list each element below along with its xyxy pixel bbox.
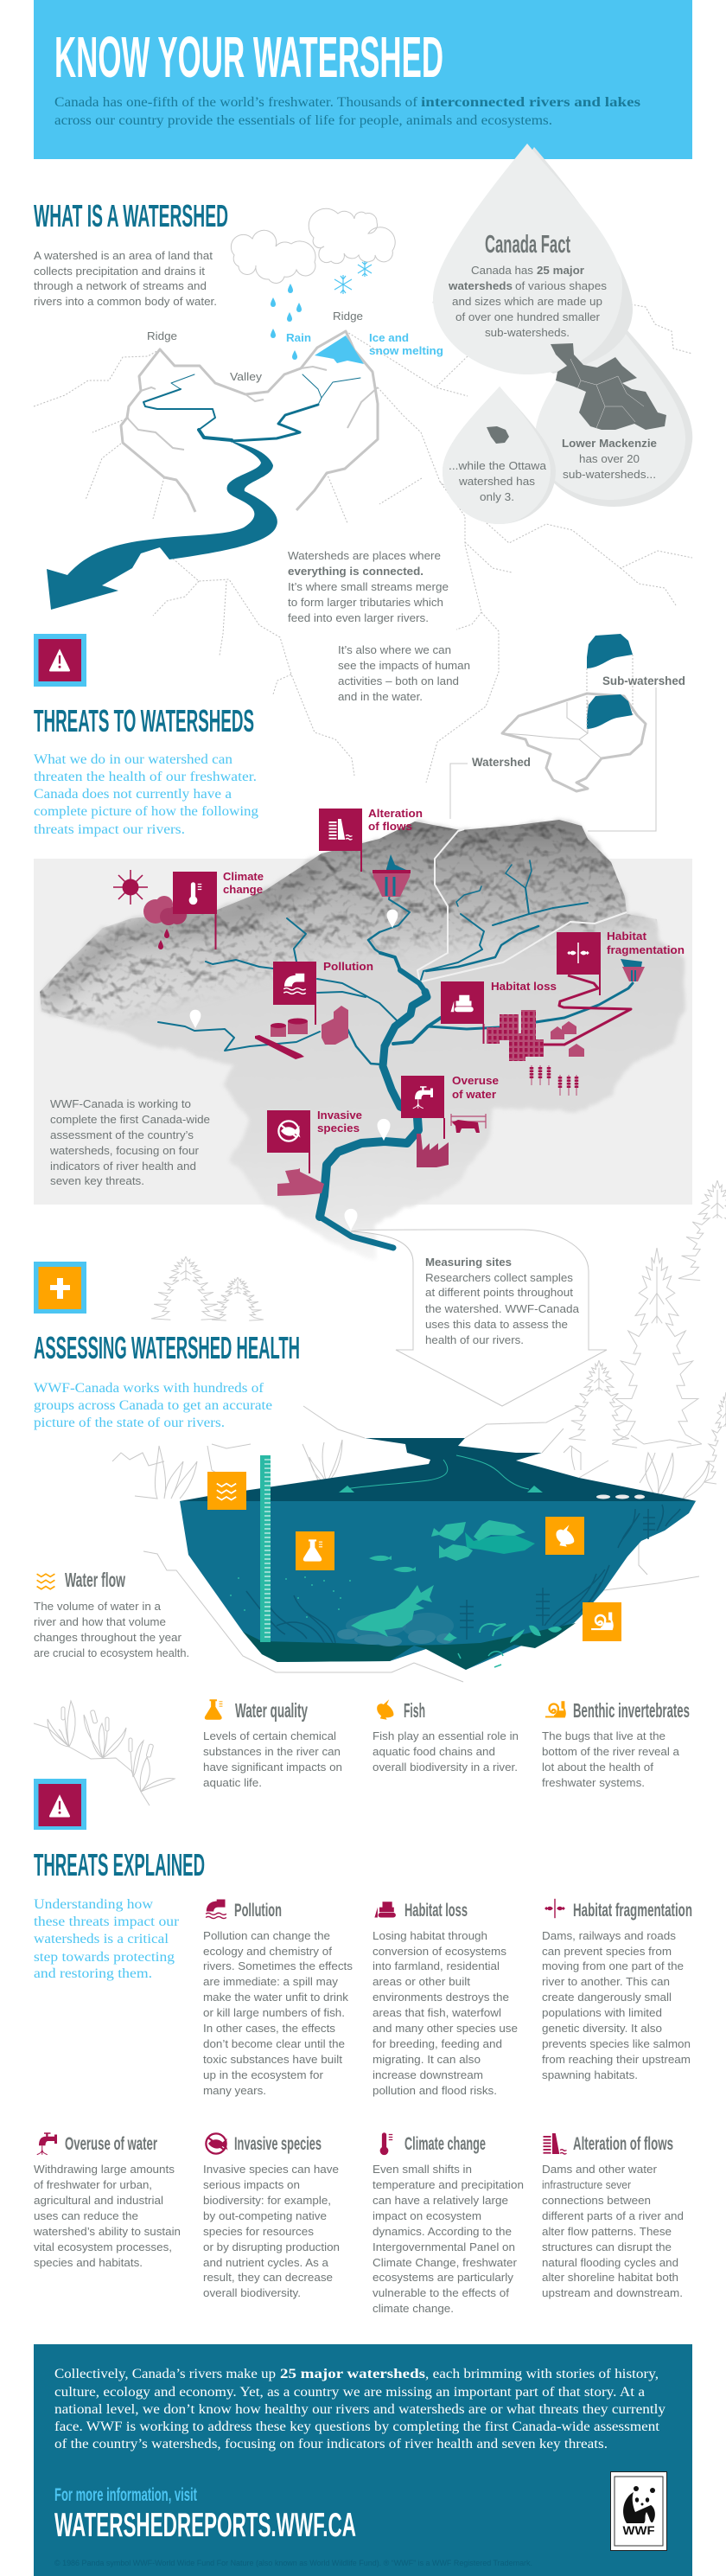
everything connected text: feed into even larger rivers. — [288, 611, 429, 624]
intro text: across our country provide the essentials of life for people, animals and ecosystems. — [54, 113, 552, 128]
watershed definition text: collects precipitation and drains it — [34, 265, 205, 278]
dam — [373, 854, 411, 897]
river cross-section — [112, 1406, 709, 1682]
lower mackenzie text: Lower Mackenzie — [562, 437, 657, 450]
indicator: fish: Fish play an essential role in — [373, 1729, 519, 1742]
indicator: water flow: are crucial to ecosystem health. — [34, 1646, 189, 1659]
summary text: Collectively, Canada’s rivers make up — [54, 2367, 276, 2381]
indicator: water quality: have significant impacts on — [203, 1761, 342, 1774]
threat detail: alteration of flows: structures can disrupt the — [542, 2240, 672, 2253]
icon: trees — [151, 1180, 726, 1484]
threat detail: overuse of water: vital ecosystem processes, — [34, 2240, 172, 2253]
threat detail: overuse of water: watershed’s ability to sustain — [33, 2225, 181, 2238]
threat detail: climate change: Climate change — [404, 2134, 486, 2154]
threat detail: overuse of water: agricultural and industrial — [34, 2194, 163, 2207]
canada fact text: 25 major — [537, 264, 584, 277]
summary text: face. WWF is working to address these key questions by completing the first Canada-wide assessment — [54, 2419, 660, 2434]
heading: threats explained: THREATS EXPLAINED — [34, 1847, 205, 1882]
river with arrow — [47, 374, 360, 610]
white sub-basin lines — [417, 829, 627, 981]
threat detail: pollution: are immediate: a spill may — [203, 1975, 339, 1988]
threat: alteration of flows: Alteration — [368, 807, 423, 820]
threats explained intro: step towards protecting — [34, 1950, 175, 1965]
icon: alert badge 2 — [34, 1779, 86, 1830]
copyright: © 1986 Panda symbol WWF-World Wide Fund For Nature (also known as World Wildlife Fund). ® “WWF” is a WWF Registered Trademark. — [54, 2559, 532, 2567]
threat detail: alteration of flows: natural flooding cycles and — [542, 2256, 678, 2269]
threat detail: invasive species: and nutrient cycles. As a — [203, 2256, 329, 2269]
threats explained intro: Understanding how — [34, 1897, 153, 1912]
threat detail: pollution: Pollution can change the — [203, 1929, 330, 1942]
indicator: water flow: river and how that volume — [34, 1615, 166, 1628]
threat detail: overuse of water — [33, 2132, 181, 2269]
sub-watershed label: Sub-watershed — [602, 674, 685, 687]
everything connected text: everything is connected. — [288, 565, 424, 578]
threat detail: habitat loss: increase downstream — [373, 2068, 483, 2081]
canada fact text: of over one hundred smaller — [455, 310, 601, 323]
measuring sites callout: health of our rivers. — [425, 1333, 524, 1346]
indicator: fish: overall biodiversity in a river. — [373, 1761, 518, 1774]
threat detail: pollution: make the water unfit to drink — [203, 1991, 349, 2004]
threat map — [26, 807, 700, 1260]
threat detail: invasive species: Invasive species — [234, 2134, 322, 2154]
rail line — [544, 975, 631, 1045]
threats explained intro: watersheds is a critical — [34, 1932, 169, 1946]
threat detail: invasive species: species for resources — [203, 2225, 315, 2238]
fish — [351, 1520, 562, 1667]
threat detail: overuse of water: uses can reduce the — [34, 2209, 138, 2222]
human impacts text: and in the water. — [338, 690, 423, 703]
threat detail: invasive species — [203, 2133, 340, 2299]
threat detail: alteration of flows: upstream and downstream. — [542, 2286, 683, 2299]
canada fact text: watersheds — [448, 279, 513, 292]
threat detail: habitat loss: and many other species use — [373, 2022, 518, 2035]
everything connected text: Watersheds are places where — [288, 549, 441, 562]
indicator: water quality: substances in the river can — [203, 1745, 341, 1758]
heading: threats to watersheds: THREATS TO WATERSHEDS — [34, 703, 254, 738]
threat detail: habitat fragmentation: Dams, railways and roads — [542, 1929, 677, 1942]
threat detail: invasive species: overall biodiversity. — [203, 2286, 301, 2299]
indicator: water quality: Levels of certain chemical — [203, 1729, 336, 1742]
rocks — [337, 1613, 454, 1646]
heading: assessing watershed health: ASSESSING WATERSHED HEALTH — [34, 1330, 300, 1365]
threat detail: pollution: In other cases, the effects — [203, 2022, 336, 2035]
indicator: fish: Fish — [404, 1699, 425, 1722]
icon: rain drops — [271, 284, 302, 360]
upper river bed — [180, 1438, 697, 1501]
threats intro: Canada does not currently have a — [34, 787, 232, 802]
threat detail: pollution: toxic substances have built — [203, 2053, 342, 2066]
threat detail: habitat fragmentation: can prevent species from — [542, 1945, 672, 1958]
threat detail: habitat loss: Habitat loss — [404, 1901, 468, 1921]
threat detail: pollution: rivers. Sometimes the effects — [203, 1959, 353, 1972]
snow and ice — [315, 336, 364, 364]
factory — [417, 1134, 449, 1167]
map text: indicators of river health and — [50, 1160, 196, 1173]
threats intro: threats impact our rivers. — [34, 822, 185, 837]
threat: climate change — [173, 870, 264, 949]
threats explained intro — [34, 1897, 180, 1981]
indicator: benthic invertebrates: lot about the health of — [542, 1761, 653, 1774]
assessing intro: picture of the state of our rivers. — [34, 1416, 225, 1430]
threat detail: habitat loss: Losing habitat through — [373, 1929, 487, 1942]
summary text — [54, 2367, 666, 2451]
threat detail: habitat loss: environments destroys the — [373, 1991, 509, 2004]
labels: ridge, valley, rain, ice: snow melting — [369, 344, 443, 357]
labels: ridge, valley, rain, ice: Valley — [230, 370, 263, 383]
icon: alert badge 1 — [34, 634, 86, 687]
threat detail: habitat loss — [373, 1901, 518, 2097]
measuring sites callout: uses this data to assess the — [425, 1318, 568, 1331]
threat detail: climate change: Intergovernmental Panel on — [373, 2240, 515, 2253]
threat: overuse of water: of water — [452, 1088, 496, 1101]
threat detail: habitat loss: areas that fish, waterfowl — [373, 2006, 501, 2019]
summary text: 25 major watersheds — [280, 2367, 425, 2381]
everything connected text: to form larger tributaries which — [288, 596, 443, 609]
measuring sites callout — [351, 1230, 607, 1406]
threats intro: threaten the health of our freshwater. — [34, 770, 257, 784]
indicator: fish — [373, 1699, 519, 1774]
ottawa text: only 3. — [480, 490, 514, 503]
icon: cattails — [34, 1701, 175, 1806]
pollution: tanks, refinery, pipe — [255, 1006, 348, 1059]
labels: ridge, valley, rain, ice: Ice and — [369, 331, 409, 344]
threat detail: alteration of flows: alter shoreline habitat both — [542, 2271, 678, 2284]
intro text — [54, 95, 640, 128]
summary text: national level, we don’t know how healthy our rivers and watersheds are or what threats they currently — [54, 2402, 666, 2417]
measuring sites callout: at different points throughout — [425, 1286, 573, 1299]
map text: WWF-Canada is working to — [50, 1097, 191, 1110]
map text — [49, 1097, 210, 1187]
canada fact text: Canada has — [471, 264, 533, 277]
drop: lower mackenzie — [535, 313, 692, 507]
habitat loss: city, houses, crops — [487, 1010, 584, 1096]
ottawa text: watershed has — [458, 475, 536, 488]
terrain — [26, 817, 700, 1260]
canada fact text: of various shapes — [515, 279, 608, 292]
threat detail: climate change: temperature and precipitation — [373, 2178, 524, 2191]
measuring sites callout: Measuring sites — [425, 1256, 512, 1269]
threat detail: pollution: don’t become clear until the — [203, 2037, 345, 2050]
threat detail: habitat loss: pollution and flood risks. — [373, 2084, 497, 2097]
threat detail: habitat loss: into farmland, residential — [373, 1959, 500, 1972]
intro text: interconnected rivers and lakes — [421, 95, 640, 110]
drop: big fact — [432, 147, 633, 374]
canada fact text: sub-watersheds. — [485, 326, 570, 339]
water — [180, 1501, 696, 1670]
assessing intro — [34, 1381, 272, 1430]
threat detail: pollution — [203, 1899, 353, 2097]
threat detail: alteration of flows — [542, 2133, 684, 2299]
threat detail: climate change — [373, 2132, 524, 2315]
map text: assessment of the country’s — [50, 1128, 194, 1141]
threat: habitat fragmentation: Habitat — [607, 930, 647, 943]
measuring site markers — [190, 910, 398, 1230]
wwf panda logo — [610, 2471, 667, 2551]
threat detail: habitat loss: for breeding, feeding and — [373, 2037, 502, 2050]
ottawa text — [449, 459, 547, 503]
climate: sun and cloud — [113, 870, 187, 949]
panel: canada fact drops — [432, 144, 692, 524]
watershed definition text: A watershed is an area of land that — [34, 249, 213, 262]
assessing intro: WWF-Canada works with hundreds of — [34, 1381, 264, 1396]
labels: ridge, valley, rain, ice: Rain — [286, 331, 311, 344]
threat detail: habitat fragmentation: create dangerously small — [542, 1991, 672, 2004]
threat detail: habitat fragmentation: moving from one part of the — [542, 1959, 684, 1972]
measuring sites callout: the watershed. WWF-Canada — [425, 1302, 580, 1315]
threat: alteration of flows: of flows — [368, 820, 412, 833]
threat: climate change: Climate — [223, 870, 264, 883]
threat detail: habitat loss: conversion of ecosystems — [373, 1945, 507, 1958]
threat detail: pollution: many years. — [203, 2084, 266, 2097]
threat detail: pollution: up in the ecosystem for — [203, 2068, 324, 2081]
depth gauge — [260, 1455, 271, 1642]
threat detail: invasive species: serious impacts on — [203, 2178, 300, 2191]
lower mackenzie text: has over 20 — [579, 452, 640, 465]
threat detail: habitat fragmentation: river to another. This can — [542, 1975, 670, 1988]
threat detail: invasive species: biodiversity: for example, — [203, 2194, 331, 2207]
human impacts text: It’s also where we can — [338, 643, 451, 656]
threat detail: alteration of flows: infrastructure sever — [542, 2178, 632, 2191]
watershed definition text: rivers into a common body of water. — [34, 295, 217, 308]
threat detail: alteration of flows: different parts of a river and — [542, 2209, 684, 2222]
threat detail: habitat loss: areas or other built — [373, 1975, 470, 1988]
threat: overuse of water — [401, 1074, 499, 1139]
threat detail: climate change: Climate Change, freshwater — [373, 2256, 518, 2269]
footer panel — [34, 2344, 692, 2576]
threat detail: invasive species: Invasive species can have — [203, 2163, 339, 2176]
header banner — [34, 0, 692, 159]
canada fact text: and sizes which are made up — [452, 295, 602, 308]
flow arrows — [339, 1455, 543, 1493]
threats explained intro: these threats impact our — [34, 1914, 180, 1929]
threat detail: alteration of flows: alter flow patterns. These — [542, 2225, 672, 2238]
threats explained intro: and restoring them. — [34, 1966, 152, 1981]
threat detail: habitat fragmentation: spawning habitats. — [542, 2068, 638, 2081]
threat detail: pollution: or kill large numbers of fish. — [203, 2006, 345, 2019]
threat: invasive species — [267, 1109, 362, 1173]
indicator: water quality — [203, 1699, 342, 1789]
threat detail: habitat fragmentation: prevents species like salmon — [542, 2037, 691, 2050]
threats intro: complete picture of how the following — [34, 804, 258, 819]
lower mackenzie text — [562, 437, 657, 481]
threat: alteration of flows — [319, 807, 423, 872]
bubbles — [230, 1576, 351, 1618]
watershed outline — [502, 694, 646, 791]
more info label: For more information, visit — [54, 2485, 197, 2505]
indicator: fish: aquatic food chains and — [373, 1745, 495, 1758]
indicator: water flow: The volume of water in a — [34, 1600, 162, 1613]
threat: habitat fragmentation: fragmentation — [607, 943, 685, 956]
threat detail: overuse of water: of freshwater for urban, — [34, 2178, 152, 2191]
watershed definition text — [34, 249, 217, 308]
threat detail: invasive species: result, they can decrease — [203, 2271, 333, 2284]
threat: habitat fragmentation — [557, 930, 685, 995]
threat detail: invasive species: by out-competing native — [203, 2209, 327, 2222]
threat detail: habitat fragmentation: from reaching their upstream — [542, 2053, 691, 2066]
labels: ridge, valley, rain, ice — [147, 310, 443, 383]
wwf panda logo: WWF — [622, 2523, 655, 2537]
indicator: water flow — [34, 1569, 189, 1659]
threat detail: climate change: can have a relatively large — [373, 2194, 508, 2207]
sub-watershed diagram — [450, 634, 685, 831]
tributaries — [158, 860, 633, 1064]
summary text: culture, ecology and economy. Yet, as a country we are missing an important part of that story. At a — [54, 2385, 645, 2400]
threat detail: climate change: Even small shifts in — [373, 2163, 472, 2176]
seaweed — [246, 1505, 680, 1643]
canada fact heading: Canada Fact — [485, 231, 570, 259]
watershed definition text: through a network of streams and — [34, 279, 207, 292]
assessing intro: groups across Canada to get an accurate — [34, 1398, 272, 1413]
threats intro: What we do in our watershed can — [34, 752, 232, 767]
map text: seven key threats. — [50, 1174, 144, 1187]
labels: ridge, valley, rain, ice: Ridge — [333, 310, 363, 323]
human impacts text: see the impacts of human — [338, 659, 470, 672]
threat detail: overuse of water: species and habitats. — [34, 2256, 143, 2269]
mountain ridge outline — [121, 331, 378, 512]
summary text: , each brimming with stories of history, — [425, 2367, 659, 2381]
measuring sites callout: Researchers collect samples — [425, 1271, 574, 1284]
threat: pollution — [273, 960, 373, 1025]
threat detail: climate change: climate change. — [373, 2302, 454, 2315]
ottawa text: ...while the Ottawa — [449, 459, 547, 472]
threat: habitat loss: Habitat loss — [491, 980, 557, 993]
main river — [320, 873, 427, 1248]
map background band — [34, 859, 692, 1205]
indicator: water flow: changes throughout the year — [34, 1631, 182, 1644]
icon: clouds — [231, 208, 395, 283]
cow and fence — [451, 1114, 486, 1133]
threat: overuse of water: Overuse — [452, 1074, 499, 1087]
indicator: benthic invertebrates — [542, 1699, 690, 1789]
indicator: water quality: Water quality — [235, 1699, 308, 1722]
indicator: water quality: aquatic life. — [203, 1776, 262, 1789]
stones on bank — [596, 1494, 645, 1499]
threat detail: overuse of water: Overuse of water — [65, 2134, 157, 2154]
indicator badges — [207, 1472, 621, 1641]
indicator: benthic invertebrates: freshwater systems. — [542, 1776, 645, 1789]
threat detail: pollution: ecology and chemistry of — [203, 1945, 332, 1958]
threat detail: alteration of flows: connections between — [542, 2194, 651, 2207]
land outlines and plants — [112, 1406, 709, 1682]
sub-watershed shapes — [587, 694, 633, 729]
small dam — [621, 959, 645, 981]
labels: ridge, valley, rain, ice: Ridge — [147, 329, 177, 342]
threat detail: climate change: dynamics. According to the — [373, 2225, 512, 2238]
everything connected text: It’s where small streams merge — [288, 580, 449, 593]
invasive: ship — [277, 1168, 324, 1196]
threat detail: pollution: Pollution — [234, 1901, 282, 1921]
map: lower mackenzie — [551, 343, 666, 430]
icon: plus badge — [34, 1262, 86, 1314]
threat detail: habitat fragmentation: genetic diversity. It also — [542, 2022, 662, 2035]
threat detail: climate change: impact on ecosystem — [373, 2209, 481, 2222]
map text: watersheds, focusing on four — [49, 1144, 200, 1157]
threat detail: habitat fragmentation: populations with limited — [542, 2006, 662, 2019]
river bottom — [243, 1623, 576, 1670]
threat detail: habitat loss: migrating. It can also — [373, 2053, 481, 2066]
drop: ottawa — [443, 387, 556, 524]
threat detail: invasive species: or by disrupting production — [203, 2240, 340, 2253]
lower mackenzie text: sub-watersheds... — [563, 468, 656, 481]
map text: complete the first Canada-wide — [50, 1113, 210, 1126]
canada fact text — [448, 264, 608, 339]
indicator: benthic invertebrates: The bugs that live at the — [542, 1729, 666, 1742]
indicator: water flow: Water flow — [65, 1569, 125, 1591]
threat: climate change: change — [223, 883, 263, 896]
map: ottawa — [487, 426, 509, 444]
threat: pollution: Pollution — [323, 960, 373, 973]
threat: habitat loss — [441, 980, 557, 1044]
human impacts text: activities – both on land — [338, 674, 459, 687]
heading: what is a watershed: WHAT IS A WATERSHED — [34, 198, 228, 233]
indicator: benthic invertebrates: bottom of the river reveal a — [542, 1745, 680, 1758]
threat detail: climate change: ecosystems are particularly — [373, 2271, 514, 2284]
threat detail: alteration of flows: Dams and other water — [542, 2163, 658, 2176]
summary text: of the country’s watersheds, focusing on four indicators of river health and seven key threats. — [54, 2437, 608, 2451]
everything connected text — [288, 549, 449, 624]
website url: WATERSHEDREPORTS.WWF.CA — [54, 2507, 356, 2544]
threat: invasive species: Invasive — [317, 1109, 362, 1122]
threat detail: overuse of water: Withdrawing large amounts — [34, 2163, 175, 2176]
threats intro — [34, 752, 258, 837]
human impacts text — [338, 643, 470, 703]
threat detail: climate change: vulnerable to the effects of — [373, 2286, 509, 2299]
threat detail: habitat fragmentation — [542, 1899, 692, 2081]
intro text: Canada has one-fifth of the world’s freshwater. Thousands of — [54, 95, 418, 110]
dashed tributaries background — [34, 303, 692, 783]
watershed label: Watershed — [472, 755, 531, 769]
icon: snowflakes — [334, 261, 372, 294]
threat: invasive species: species — [317, 1122, 360, 1135]
